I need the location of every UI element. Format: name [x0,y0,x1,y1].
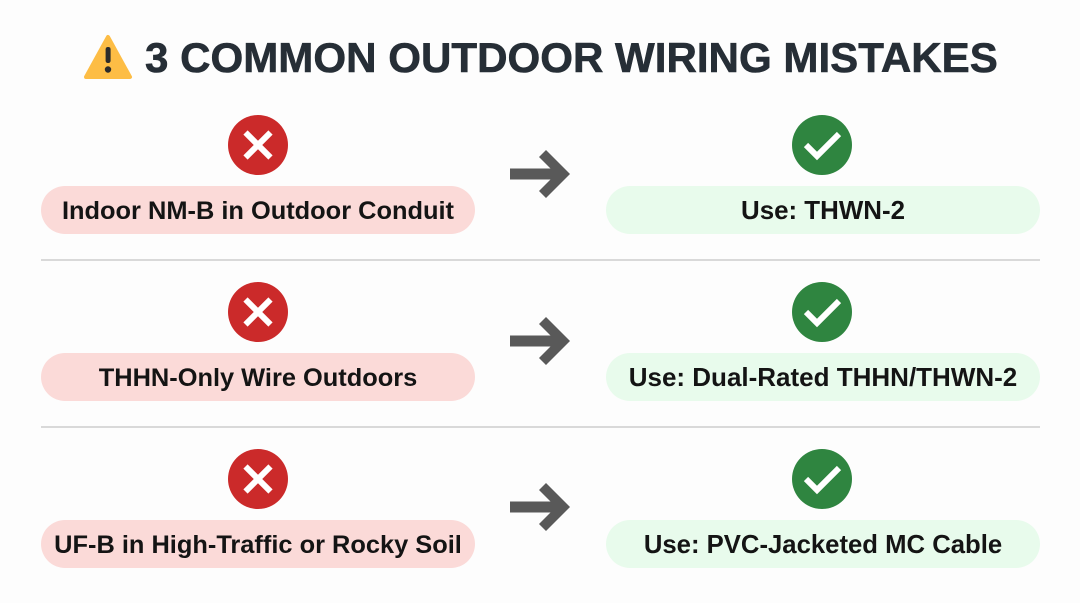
icon: warning triangle [84,34,132,79]
icon: red x row 2 [228,282,288,342]
title: 3 COMMON OUTDOOR WIRING MISTAKES [145,34,998,81]
icon: red x row 3 [228,449,288,509]
arrow row 2 [510,317,570,365]
fix label row 2 [606,353,1040,401]
icon: green check row 3 [792,449,852,509]
mistake label row 3: UF-B in High-Traffic or Rocky Soil [54,531,462,559]
arrow row 1 [510,150,570,198]
fix label row 3 [606,520,1040,568]
mistake label row 2 [41,353,475,401]
mistake label row 2: THHN-Only Wire Outdoors [99,364,417,392]
icon: green check row 1 [792,115,852,175]
mistake label row 3 [41,520,475,568]
icon: green check row 2 [792,282,852,342]
fix label row 3: Use: PVC-Jacketed MC Cable [644,531,1002,559]
fix label row 1 [606,186,1040,234]
fix label row 2: Use: Dual-Rated THHN/THWN-2 [629,362,1017,392]
mistake label row 1 [41,186,475,234]
icon: red x row 1 [228,115,288,175]
arrow row 3 [510,483,570,531]
fix label row 1: Use: THWN-2 [741,197,905,225]
mistake label row 1: Indoor NM-B in Outdoor Conduit [62,197,454,225]
